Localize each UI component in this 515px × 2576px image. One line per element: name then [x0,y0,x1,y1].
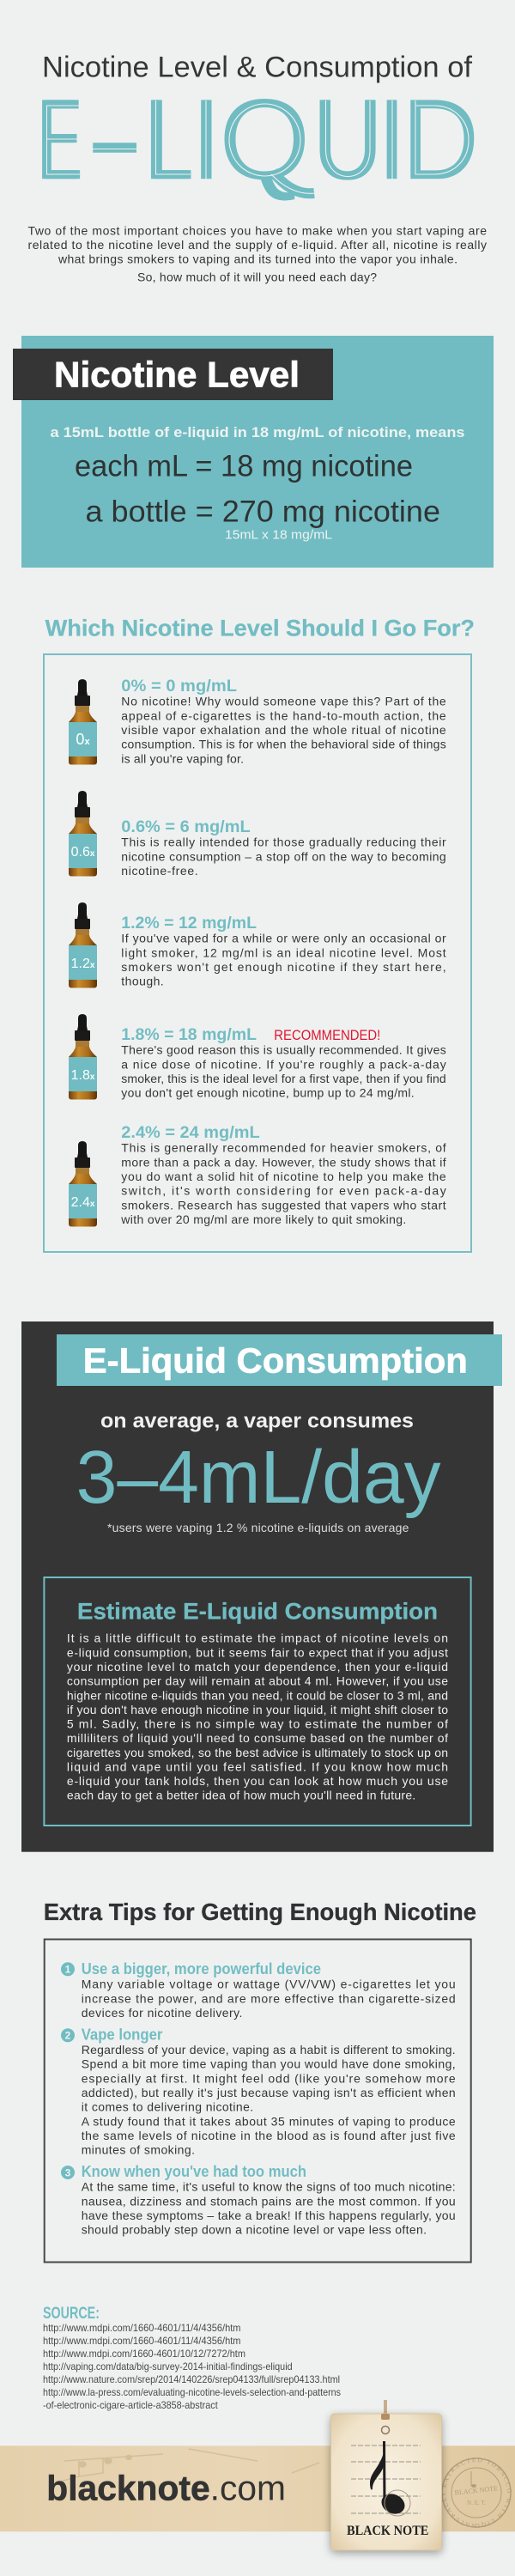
icon: bottle 1.2x [69,902,97,987]
tip 2: Spend a bit more time vaping than you would have done smoking, [82,2057,456,2071]
sources: http://www.mdpi.com/1660-4601/11/4/4356/htm [43,2322,240,2334]
option: 24 mg/mL: with over 20 mg/ml are more likely to quit smoking. [120,1212,406,1226]
icon: bottle 1.8x [69,1014,97,1099]
option: 6 mg/mL: This is really intended for those gradually reducing their [121,835,446,849]
big e-liquid wordmark: L [144,76,191,204]
panel: nicotine level [13,336,494,568]
heading tag: e-liquid consumption: E-Liquid Consumption [83,1340,468,1380]
stamp: N. E. T. [467,2500,486,2506]
tip 2 [61,2026,456,2157]
panel: estimate consumption: your nicotine level to match your dependence, then your e-liquid [67,1660,448,1674]
big e-liquid wordmark: I [191,76,221,204]
icon: music note [370,2441,408,2518]
sources [43,2305,341,2411]
big e-liquid wordmark: U [312,76,381,204]
sources: http://www.nature.com/srep/2014/140226/srep04133/full/srep04133.html [43,2373,340,2385]
callout: recommended: RECOMMENDED! [274,1027,380,1043]
tip 3 [61,2163,456,2237]
panel: estimate consumption: It is a little difficult to estimate the impact of nicotine levels on [67,1631,448,1645]
intro paragraph: Two of the most important choices you have to make when you start vaping are [27,223,487,237]
panel: estimate consumption: e-liquid your tank holds, then you can look at how much you use [67,1774,448,1788]
icon: bottle 1.2x: 1.2x [71,957,95,971]
panel: e-liquid consumption [21,1321,502,1852]
icon: bottle 0x: 0x [76,731,90,748]
icon: bottle 2.4x: 2.4x [71,1195,95,1210]
heading: extra tips: Extra Tips for Getting Enough Nicotine [44,1899,476,1925]
icon: bottle 0.6x: 0.6x [71,845,95,860]
tip 2: addicted), but really it's just because vaping isn't as efficient when [82,2086,456,2099]
heading: which nicotine level: Which Nicotine Level Should I Go For? [45,616,475,641]
option: 18 mg/mL recommended: you don't get enough nicotine, bump up to 24 mg/ml. [121,1086,415,1100]
sources: SOURCE: [43,2305,100,2323]
option: 0 mg/mL: 0% = 0 mg/mL [121,677,237,696]
big e-liquid wordmark: E [37,76,80,204]
tip 3: nausea, dizziness and stomach pains are the most common. If you [82,2194,456,2208]
intro paragraph: related to the nicotine level and the supply of e-liquid. After all, nicotine is really [27,238,487,252]
option: 24 mg/mL: This is generally recommended for heavier smokers, of [121,1141,446,1155]
heading tag: nicotine level: Nicotine Level [54,355,300,395]
option: 24 mg/mL: you do want a solid hit of nicotine to help you make the [121,1170,446,1183]
big e-liquid wordmark: Q [219,76,311,204]
panel: estimate consumption: each day to get a better idea of how much you'll need in future. [67,1789,415,1802]
option: 12 mg/mL: light smoker, 12 mg/ml is an ideal nicotine level. Most [121,945,446,959]
icon: bottle 1.8x: 1.8x [71,1068,95,1083]
tip 1 [61,1960,456,2020]
option: 12 mg/mL [69,902,446,988]
tip 2: minutes of smoking. [82,2143,195,2157]
option: 18 mg/mL recommended: smoker, this is the ideal level for a first vape, then if you find [121,1072,446,1085]
option: 24 mg/mL: more than a pack a day. However, the study shows that if [121,1155,446,1169]
option: 0 mg/mL: consumption. This is for when the behavioral side of things [121,738,446,751]
heading tag: nicotine level [13,349,333,400]
tip 3: Know when you've had too much [82,2163,306,2180]
brand wordmark: blacknote.com [46,2469,286,2508]
tip 2: especially at first. It might feel odd (like you're somehow more [82,2071,456,2085]
option: 18 mg/mL recommended: There's good reason this is usually recommended. It gives [121,1043,446,1057]
panel: estimate consumption: milliliters of liquid you'll need to consume based on the number of [67,1731,448,1745]
panel: estimate consumption: higher nicotine e-liquids than you need, it could be closer to 3 ml, and [67,1688,448,1702]
intro paragraph: what brings smokers to vaping and its turned into the vapor you inhale. [58,252,457,266]
tag label: BLACK NOTE [347,2524,428,2538]
tip 2: the same levels of nicotine in the blood as is found after just five [82,2129,456,2142]
tip 3: At the same time, it's useful to know the signs of too much nicotine: [82,2180,456,2194]
panel: estimate consumption: if you don't have enough nicotine in your liquid, it might shift closer to [67,1703,448,1716]
tip 3: should probably step down a nicotine level or vape less often. [82,2223,427,2237]
option: 6 mg/mL: nicotine consumption – a stop off on the way to becoming [121,849,446,863]
sources: http://www.mdpi.com/1660-4601/11/4/4356/htm [43,2335,240,2347]
icon: number 1 [61,1962,75,1976]
option: 0 mg/mL: No nicotine! Why would someone vape this? Part of the [121,695,446,708]
icon: number 2 [61,2028,75,2042]
big stat: 3–4mL/day [76,1436,441,1519]
panel: extra tips [45,1939,471,2262]
icon: bottle 0x [69,679,97,764]
icon: bottle 0.6x [69,791,97,876]
footnote: *users were vaping 1.2 % nicotine e-liquids on average [107,1521,409,1534]
option: 0 mg/mL: visible vapor exhalation and the whole ritual of nicotine [121,723,446,737]
tip 2: A study found that it takes about 35 minutes of vaping to produce [82,2114,456,2128]
option: 18 mg/mL recommended: 1.8% = 18 mg/mL [121,1025,257,1044]
decorative faint music notes [60,2449,319,2482]
sources: http://www.la-press.com/evaluating-nicotine-levels-selection-and-patterns [43,2386,341,2398]
equation: each mL: each mL = 18 mg nicotine [75,449,413,483]
stamp: NATURALLY EXTRACTED TOBACCO WITH LIQUID [442,2458,512,2528]
panel: nicotine level options [44,654,471,1252]
icon: number 1: 1 [65,1964,71,1976]
stamp: BLACK NOTE [454,2484,498,2497]
tip 1: increase the power, and are more effective than cigarette-sized [82,1991,456,2005]
icon: number 2: 2 [65,2030,71,2042]
option: 24 mg/mL: switch, it's worth considering for even pack-a-day [121,1184,446,1198]
tip 2: Vape longer [82,2026,162,2043]
big e-liquid wordmark: I [377,76,407,204]
icon: number 3 [61,2166,75,2179]
option: 12 mg/mL: 1.2% = 12 mg/mL [121,914,257,933]
option: 12 mg/mL: though. [121,975,164,988]
option: 0 mg/mL: is all you're vaping for. [121,751,244,765]
big e-liquid wordmark: - [85,67,145,209]
option: 0 mg/mL [69,677,446,765]
option: 18 mg/mL recommended [69,1014,446,1100]
staff lines [351,2445,421,2513]
icon: bottle 2.4x [69,1141,97,1226]
option: 24 mg/mL: smokers. Research has suggested that vapers who start [121,1198,446,1212]
tip 1: Many variable voltage or wattage (VV/VW) e-cigarettes let you [82,1978,456,1991]
option: 6 mg/mL: nicotine-free. [121,864,198,878]
panel: estimate consumption [44,1577,471,1826]
tip 1: devices for nicotine delivery. [82,2006,242,2020]
heading tag: e-liquid consumption [57,1334,502,1386]
big e-liquid wordmark [37,67,480,209]
option: 24 mg/mL [69,1123,446,1226]
panel: estimate consumption: consumption per day will remain at about 4 ml. However, if you use [67,1674,448,1688]
option: 6 mg/mL [69,791,446,878]
sources: http://vaping.com/data/big-survey-2014-initial-findings-eliquid [43,2360,293,2372]
option: 18 mg/mL recommended: a nice dose of nicotine. If you're roughly a pack-a-day [121,1057,446,1071]
panel: estimate consumption: liquid and vape until you feel satisfied. If you know how much [67,1760,448,1774]
option: 24 mg/mL: 2.4% = 24 mg/mL [121,1123,260,1142]
panel: estimate consumption: e-liquid consumption, but it seems fair to expect that if you adjust [67,1645,448,1659]
sources: http://www.mdpi.com/1660-4601/10/12/7272/htm [43,2348,245,2360]
icon: number 3: 3 [65,2166,71,2178]
equation: a bottle: a bottle = 270 mg nicotine [86,495,440,528]
tip 2: it comes to delivering nicotine. [82,2100,253,2114]
option: 12 mg/mL: If you've vaped for a while or were only an occasional or [121,932,446,945]
panel: estimate consumption: Estimate E-Liquid Consumption [77,1599,438,1625]
big e-liquid wordmark: D [402,76,480,204]
hang tag logo [331,2400,441,2550]
lead sentence: a 15mL bottle of e-liquid in 18 mg/mL of nicotine, means [50,424,465,440]
sources: -of-electronic-cigare-article-a3858-abstract [43,2399,218,2411]
title: Nicotine Level & Consumption of [42,51,473,83]
tip 3: have these symptoms – take a break! If this happens regularly, you [82,2208,456,2222]
intro paragraph: So, how much of it will you need each day? [137,270,377,283]
option: 0 mg/mL: appeal of e-cigarettes is the hand-to-mouth action, the [121,708,446,722]
option: 6 mg/mL: 0.6% = 6 mg/mL [121,817,251,836]
panel: estimate consumption: cigarettes you smoked, so the best advice is ultimately to stock up on [67,1746,448,1759]
equation note: 15mL x 18 mg/mL [225,528,332,543]
option: 12 mg/mL: smokers won't get enough nicotine if they start here, [121,960,446,974]
intro paragraph [27,223,487,283]
tip 1: Use a bigger, more powerful device [82,1960,321,1978]
tip 2: Regardless of your device, vaping as a habit is different to smoking. [82,2043,456,2057]
lead sentence: on average, a vaper consumes [100,1409,414,1432]
panel: estimate consumption: 5 ml. Sadly, there is no simple way to estimate the number of [67,1717,448,1731]
